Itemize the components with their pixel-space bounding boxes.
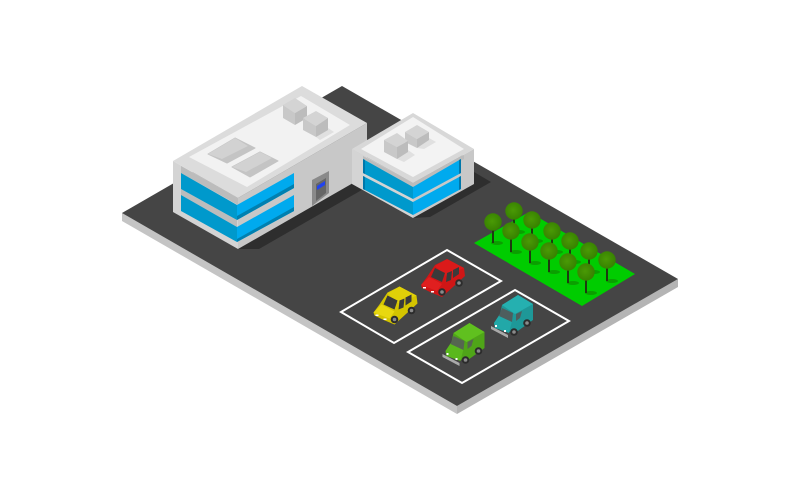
rooftop unit 1 xyxy=(384,133,415,162)
skylight 1 xyxy=(208,138,255,163)
rooftop unit 2 xyxy=(303,111,334,140)
van: teal xyxy=(491,295,533,338)
ground slab xyxy=(122,86,678,414)
small building xyxy=(352,113,474,218)
rooftop unit 1 xyxy=(283,98,307,125)
car: red xyxy=(421,259,465,297)
roof surface xyxy=(189,96,350,187)
grass area xyxy=(474,212,635,306)
van: green xyxy=(442,323,484,366)
windows right face xyxy=(237,173,294,242)
skylight 2 xyxy=(232,152,278,177)
car: yellow xyxy=(374,286,418,324)
trees xyxy=(484,202,618,295)
windows right face xyxy=(413,159,461,215)
windows left face xyxy=(363,159,413,215)
building shadows xyxy=(238,170,491,249)
rooftop unit 2 xyxy=(405,125,436,149)
large building xyxy=(173,86,367,249)
parking bay 1 xyxy=(341,250,501,343)
parking bay 2 xyxy=(408,290,569,383)
windows left face xyxy=(181,173,237,242)
door xyxy=(312,171,329,206)
roof surface xyxy=(361,117,464,177)
